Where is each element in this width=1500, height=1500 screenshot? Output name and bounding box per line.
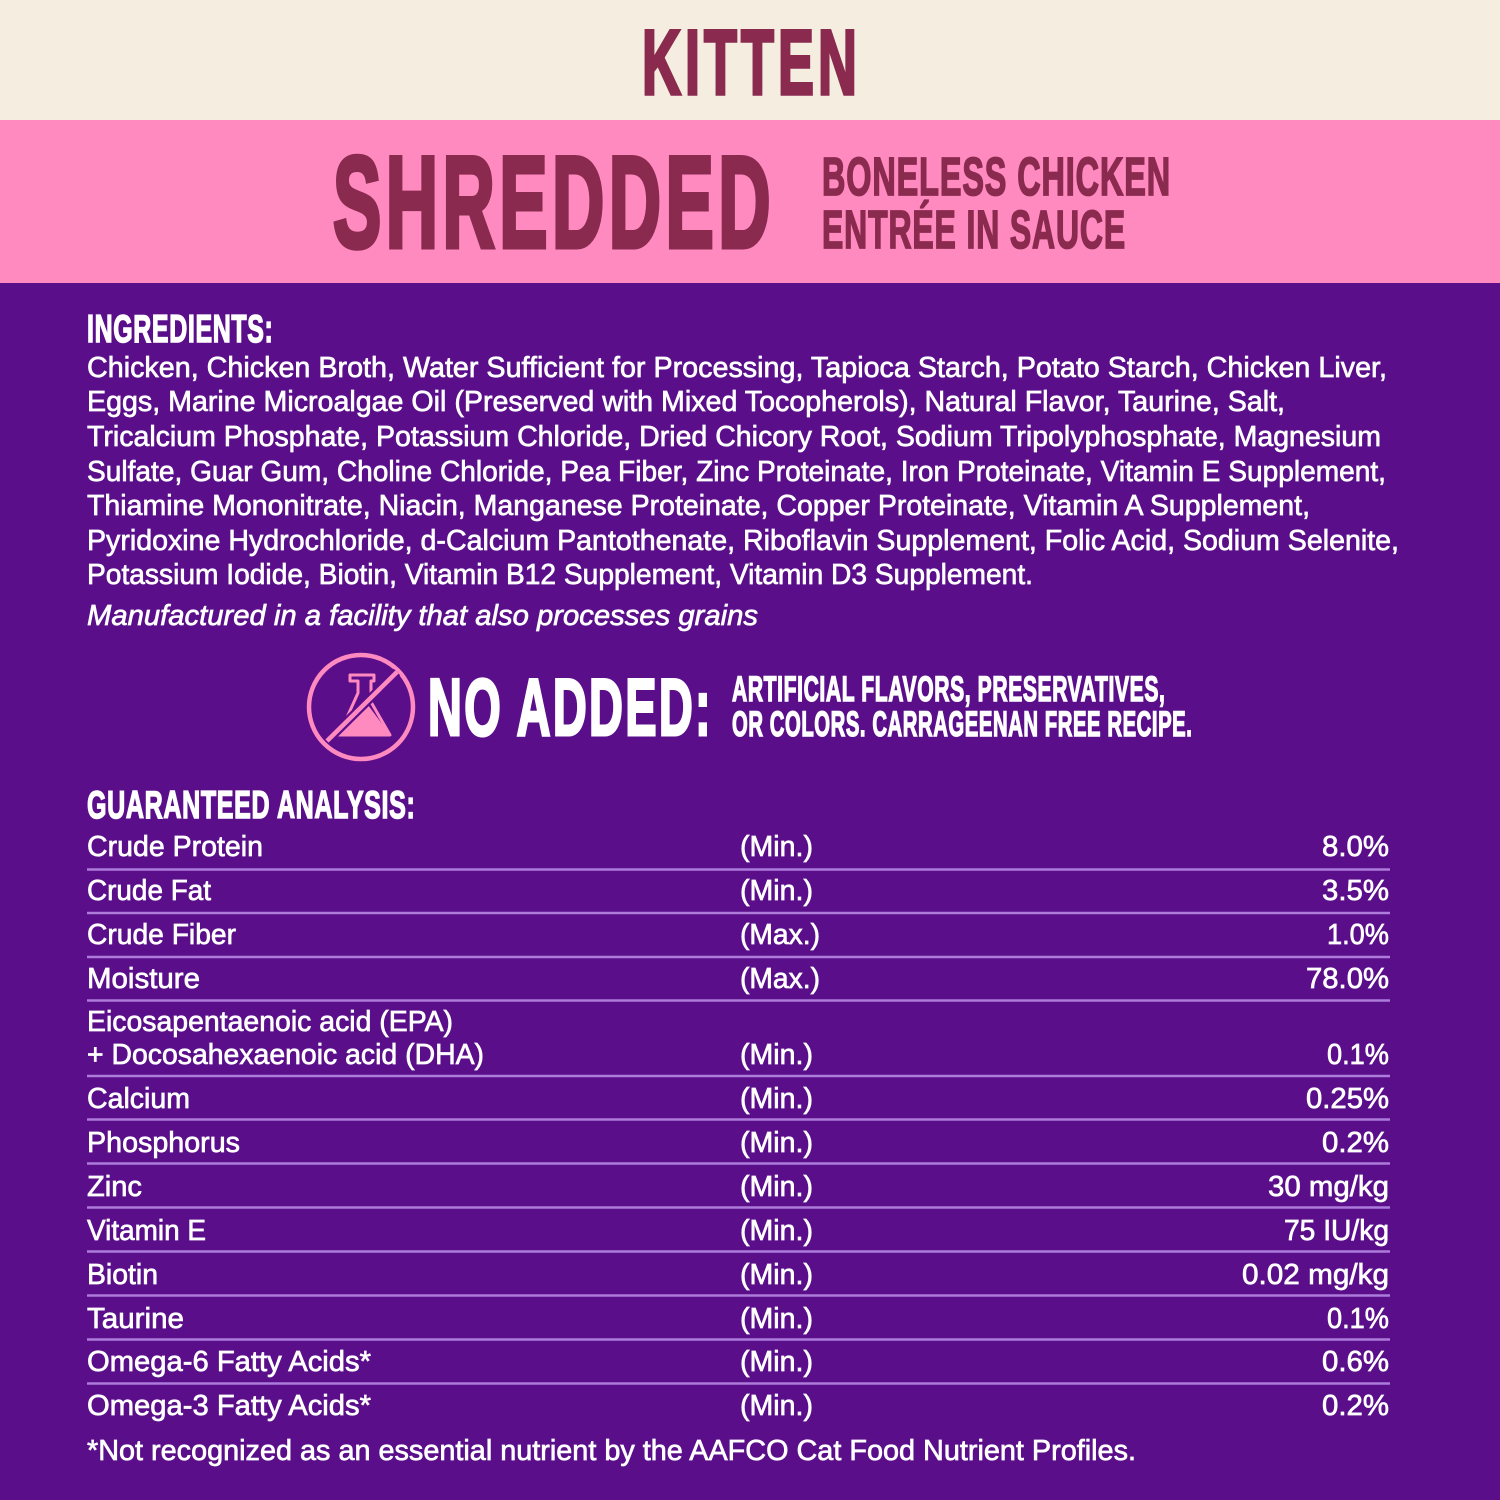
row: vitamin E: Vitamin E [87,1215,206,1247]
row: omega-3 [87,1390,1389,1422]
row: biotin: (Min.) [740,1259,813,1291]
row: crude fiber: (Max.) [740,919,820,951]
row: biotin: 0.02 mg/kg [1242,1259,1389,1291]
row: crude fiber: 1.0% [1327,919,1389,951]
subheading: product description: BONELESS CHICKEN [822,147,1171,207]
row: taurine: 0.1% [1327,1303,1389,1335]
heading: no added: NO ADDED: [428,663,713,753]
text block: no added details: ARTIFICIAL FLAVORS, PRESERVATIVES, [732,670,1166,709]
text block: no added details [732,670,1192,744]
text block: ingredients list: Chicken, Chicken Broth, Water Sufficient for Processing, Tapioca Starch, Potato Starch, Chicken Liver, [87,352,1387,384]
row: taurine: (Min.) [740,1303,813,1335]
row: crude protein [87,831,1389,863]
icon: crossed-out flask [309,655,413,759]
row: EPA + DHA: + Docosahexaenoic acid (DHA) [87,1039,484,1071]
row: crude protein: Crude Protein [87,831,263,863]
text block: ingredients list: Tricalcium Phosphate, Potassium Chloride, Dried Chicory Root, Sodium Tripolyphosphate, Magnesium [87,421,1381,453]
row: biotin: Biotin [87,1259,158,1291]
text block: ingredients list: Sulfate, Guar Gum, Choline Chloride, Pea Fiber, Zinc Proteinate, Iron Proteinate, Vitamin E Supplement, [87,456,1386,488]
subheading: product description [822,147,1171,260]
row: omega-3: (Min.) [740,1390,813,1422]
row: omega-6: (Min.) [740,1346,813,1378]
row: moisture: 78.0% [1306,963,1389,995]
row: moisture: Moisture [87,963,200,995]
row: omega-6: Omega-6 Fatty Acids* [87,1346,371,1378]
table: guaranteed analysis [87,831,1390,1422]
row: crude protein: 8.0% [1322,831,1389,863]
row: biotin [87,1259,1389,1291]
row: crude fat [87,875,1389,907]
row: calcium: Calcium [87,1083,190,1115]
row: omega-3: 0.2% [1322,1390,1389,1422]
row: calcium: 0.25% [1306,1083,1389,1115]
row: zinc: 30 mg/kg [1268,1171,1389,1203]
row: zinc: (Min.) [740,1171,813,1203]
row: crude fiber [87,919,1389,951]
subheading: product description: ENTRÉE IN SAUCE [822,200,1126,260]
panel: pink banner [0,120,1500,283]
panel: cream header [0,0,1500,120]
text block: ingredients list: Eggs, Marine Microalgae Oil (Preserved with Mixed Tocopherols), Natural Flavor, Taurine, Salt, [87,386,1285,418]
row: vitamin E: 75 IU/kg [1284,1215,1389,1247]
row: crude fat: (Min.) [740,875,813,907]
row: crude protein: (Min.) [740,831,813,863]
row: crude fat: Crude Fat [87,875,211,907]
heading: SHREDDED: SHREDDED [333,129,775,275]
heading: ingredients: INGREDIENTS: [87,308,274,351]
heading: guaranteed analysis: GUARANTEED ANALYSIS: [87,784,416,827]
row: moisture: (Max.) [740,963,820,995]
row: zinc: Zinc [87,1171,142,1203]
row: crude fiber: Crude Fiber [87,919,236,951]
title: KITTEN: KITTEN [642,12,861,114]
row: zinc [87,1171,1389,1203]
row: EPA + DHA: (Min.) [740,1039,813,1071]
row: EPA + DHA [87,1006,1389,1071]
row: EPA + DHA: 0.1% [1327,1039,1389,1071]
row: omega-3: Omega-3 Fatty Acids* [87,1390,371,1422]
row: vitamin E: (Min.) [740,1215,813,1247]
row: omega-6: 0.6% [1322,1346,1389,1378]
row: moisture [87,963,1389,995]
row: taurine: Taurine [87,1303,184,1335]
row: calcium: (Min.) [740,1083,813,1115]
row: vitamin E [87,1215,1389,1247]
row: calcium [87,1083,1389,1115]
row: phosphorus: Phosphorus [87,1127,240,1159]
footnote: *Not recognized as an essential nutrient by the AAFCO Cat Food Nutrient Profiles. [87,1435,1136,1467]
row: EPA + DHA: Eicosapentaenoic acid (EPA) [87,1006,453,1038]
text block: ingredients list: Pyridoxine Hydrochloride, d-Calcium Pantothenate, Riboflavin Supplement, Folic Acid, Sodium Selenite, [87,525,1399,557]
text block: ingredients list [87,352,1399,591]
row: phosphorus [87,1127,1389,1159]
row: omega-6 [87,1346,1389,1378]
text block: ingredients list: Thiamine Mononitrate, Niacin, Manganese Proteinate, Copper Proteinate, Vitamin A Supplement, [87,490,1310,522]
row: taurine [87,1303,1389,1335]
text block: facility note: Manufactured in a facility that also processes grains [87,600,758,632]
row: phosphorus: (Min.) [740,1127,813,1159]
text block: ingredients list: Potassium Iodide, Biotin, Vitamin B12 Supplement, Vitamin D3 Supplement. [87,559,1033,591]
row: phosphorus: 0.2% [1322,1127,1389,1159]
row: crude fat: 3.5% [1322,875,1389,907]
